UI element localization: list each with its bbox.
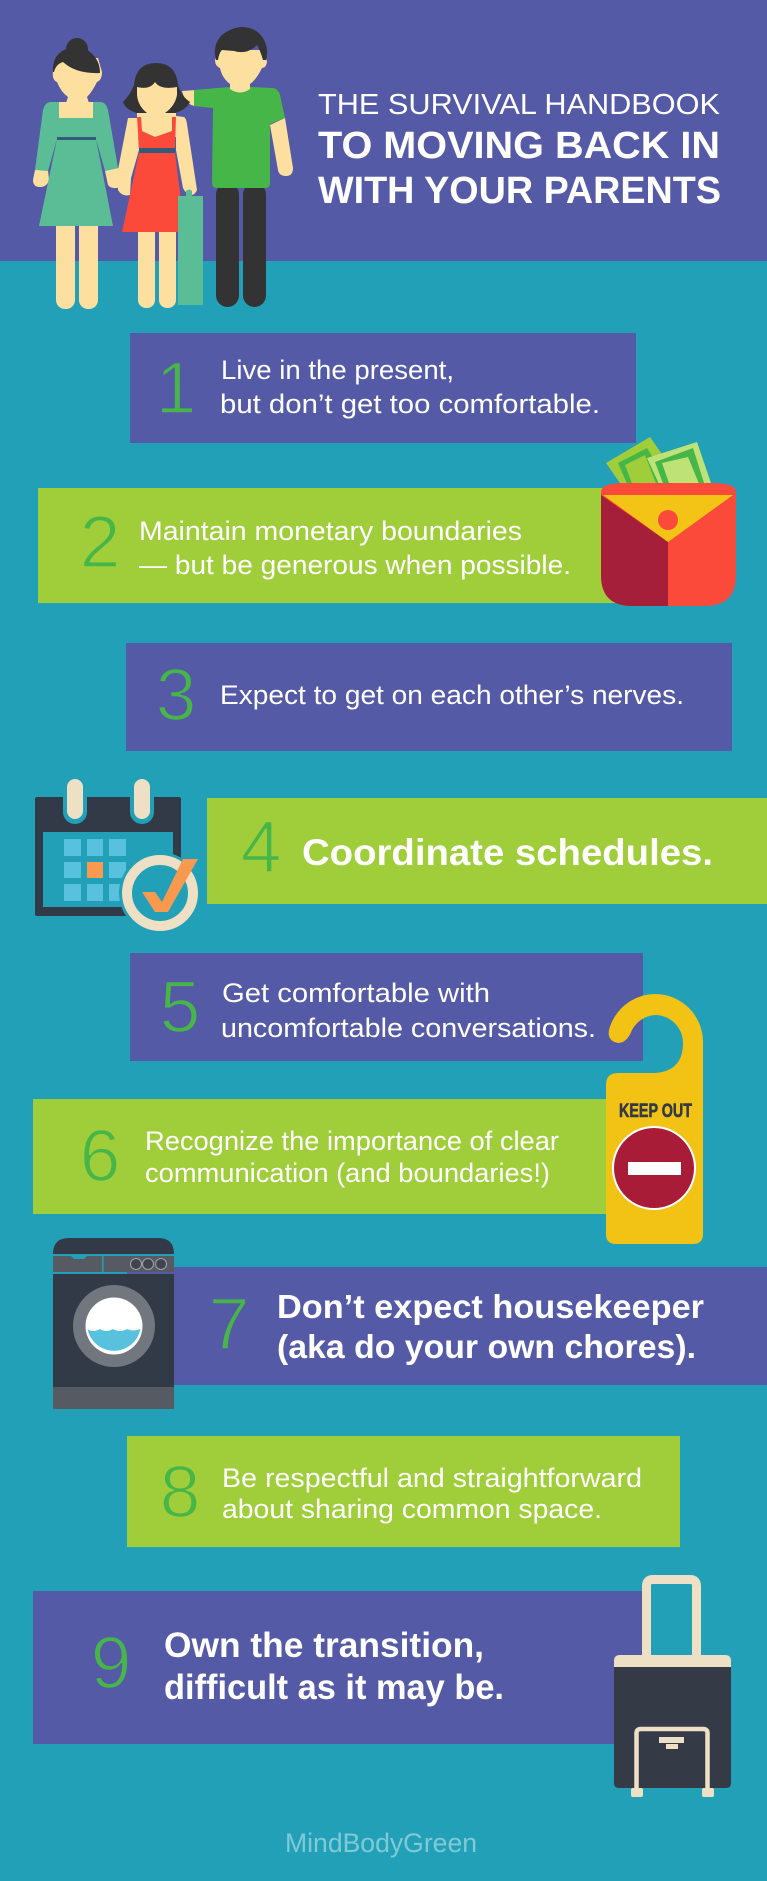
figure: daughter [117, 63, 197, 308]
icon: rolling suitcase [614, 1580, 731, 1797]
tip 3 panel: Expect to get on each other’s nerves. [220, 680, 684, 710]
tip 8 panel [127, 1436, 680, 1547]
title [318, 89, 721, 212]
tip 5 panel [130, 953, 643, 1061]
suitcase: green [178, 190, 203, 305]
family illustration [33, 27, 293, 309]
figure: mother [33, 38, 122, 309]
title: WITH YOUR PARENTS [318, 170, 721, 212]
footer credit: MindBodyGreen [285, 1828, 477, 1858]
tip 6 panel: 6 [80, 1116, 120, 1197]
tip 2 panel: 2 [80, 502, 120, 583]
tip 6 panel [33, 1099, 608, 1214]
tip 6 panel: communication (and boundaries!) [145, 1158, 550, 1188]
header band [0, 0, 767, 261]
tip 8 panel: 8 [160, 1452, 200, 1533]
tip 4 panel: 4 [241, 807, 281, 888]
icon: calendar with check [35, 779, 201, 934]
tip 1 panel: Live in the present, [221, 355, 454, 385]
tip 5 panel: Get comfortable with [222, 978, 490, 1008]
title: TO MOVING BACK IN [318, 125, 720, 167]
tip 7 panel [174, 1267, 767, 1385]
tip 8 panel: Be respectful and straightforward [222, 1463, 642, 1493]
tip 7 panel: (aka do your own chores). [277, 1328, 696, 1365]
icon: washing machine [53, 1238, 174, 1409]
tip 1 panel: 1 [156, 348, 196, 429]
tip 9 panel: Own the transition, [164, 1626, 484, 1665]
tip 2 panel [38, 488, 628, 603]
tip 3 panel: 3 [156, 655, 196, 736]
tip 6 panel: Recognize the importance of clear [145, 1126, 559, 1156]
title: THE SURVIVAL HANDBOOK [318, 89, 721, 121]
figure: father [182, 27, 293, 307]
tip 5 panel: 5 [160, 967, 200, 1048]
tip 7 panel: 7 [209, 1284, 249, 1365]
tip 7 panel: Don’t expect housekeeper [277, 1288, 704, 1325]
tip 2 panel: Maintain monetary boundaries [139, 516, 522, 546]
icon: keep out door hanger: KEEP OUT [619, 1101, 692, 1122]
icon: keep out door hanger [606, 994, 703, 1244]
tip 8 panel: about sharing common space. [222, 1494, 602, 1524]
icon: wallet with money [601, 437, 736, 606]
tip 9 panel [33, 1591, 645, 1744]
tip 9 panel: difficult as it may be. [164, 1668, 504, 1707]
tip 4 panel [207, 798, 767, 904]
tip 3 panel [126, 643, 732, 751]
tip 4 panel: Coordinate schedules. [302, 832, 713, 873]
tip 1 panel [130, 333, 636, 443]
tip 2 panel: — but be generous when possible. [139, 550, 571, 580]
tip 1 panel: but don’t get too comfortable. [220, 389, 600, 419]
tip 5 panel: uncomfortable conversations. [221, 1013, 596, 1043]
tip 9 panel: 9 [91, 1623, 131, 1704]
